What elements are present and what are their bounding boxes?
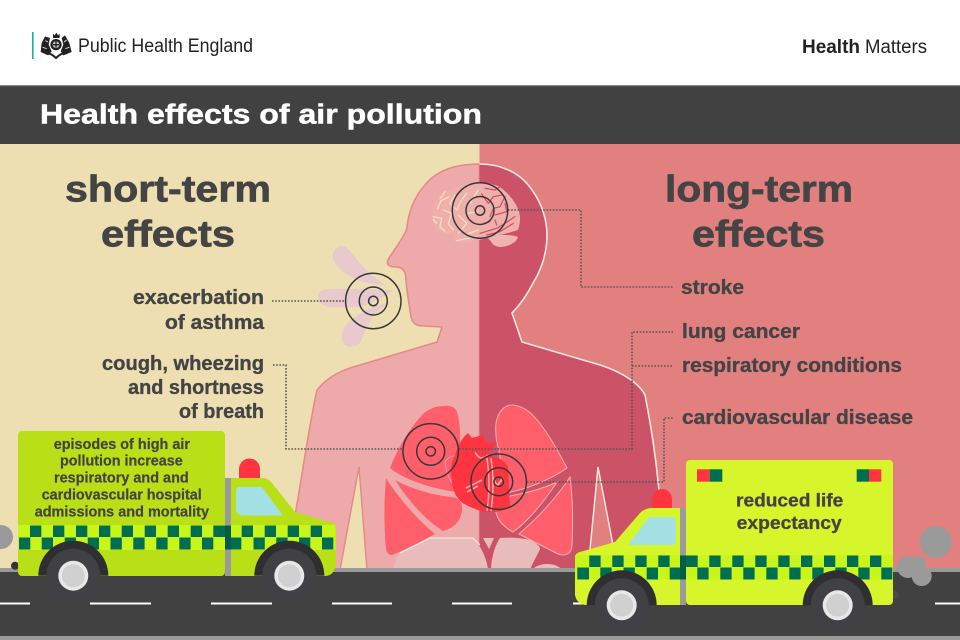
brain folds: left — [433, 190, 478, 241]
target: asthma — [346, 273, 401, 329]
title band — [0, 85, 960, 144]
rear flags right — [857, 469, 881, 482]
panel: short-term background — [0, 144, 480, 570]
dotted leader lines — [272, 210, 673, 482]
cab — [225, 478, 336, 576]
label: exacerbation of asthma: exacerbation — [133, 287, 264, 309]
title: Health effects of air pollution — [40, 98, 482, 130]
windscreen — [236, 487, 283, 516]
right middle lobe — [496, 482, 557, 532]
gap under right arm — [588, 467, 620, 570]
brain folds: right — [480, 187, 515, 235]
windscreen — [628, 517, 676, 545]
label: exacerbation of asthma — [133, 287, 265, 334]
heading: long-term effects — [665, 169, 853, 255]
ambulance text: admissions and mortality — [35, 505, 209, 521]
right upper lobe — [496, 405, 567, 493]
road — [0, 568, 960, 640]
heading: short-term effects: effects — [101, 214, 235, 255]
ambulance text: respiratory and and — [54, 470, 189, 486]
ambulance text — [35, 437, 209, 521]
logo wordmark: Public Health England — [78, 36, 253, 57]
ambulance text: pollution increase — [60, 454, 183, 470]
checker band — [18, 525, 336, 550]
checker band — [575, 555, 893, 580]
accent line — [32, 32, 34, 59]
health matters wordmark: Matters — [865, 37, 927, 58]
rear wheel — [802, 570, 873, 620]
lungs — [384, 405, 573, 555]
siren — [652, 489, 672, 508]
box body — [18, 431, 225, 576]
icon: royal crest — [41, 33, 72, 58]
label: exacerbation of asthma: of asthma — [165, 312, 265, 334]
front wheel — [586, 570, 657, 620]
lane markings — [0, 602, 960, 604]
door strip — [225, 478, 231, 576]
label: cardiovascular disease: cardiovascular disease — [682, 407, 913, 429]
label: respiratory conditions: respiratory conditions — [682, 355, 902, 377]
left exhaust pipe — [11, 562, 19, 570]
human body silhouette — [285, 164, 668, 572]
ambulance text: episodes of high air — [54, 437, 190, 453]
exhaust smoke: long-term — [897, 526, 952, 586]
health matters wordmark: Health — [802, 37, 860, 58]
heart — [445, 433, 510, 512]
heading: long-term effects: effects — [692, 214, 825, 255]
left lower lobe — [384, 478, 435, 555]
left upper lobe — [390, 406, 460, 492]
box body — [686, 460, 893, 605]
gap under left arm — [340, 467, 367, 570]
icon: breath puffs — [318, 246, 393, 347]
target: lungs — [403, 424, 458, 479]
health matters wordmark — [802, 37, 927, 58]
rear wheel — [38, 540, 108, 591]
ambulance text: expectancy — [737, 513, 842, 533]
right exhaust pipe — [891, 591, 899, 599]
front wheel — [254, 540, 324, 591]
right lower lobe — [519, 477, 573, 555]
strip over band — [225, 526, 231, 550]
ambulance text: cardiovascular hospital — [42, 487, 202, 503]
header bar — [0, 0, 960, 85]
body: long-term half — [480, 164, 668, 572]
cerebellum — [488, 235, 518, 247]
body: short-term half — [285, 164, 480, 572]
label: stroke: stroke — [681, 277, 744, 299]
left exhaust smoke — [0, 525, 13, 549]
ambulance text — [736, 491, 843, 533]
target: brain — [452, 183, 508, 238]
label: lung cancer: lung cancer — [682, 321, 800, 343]
ambulance text: reduced life — [736, 491, 843, 511]
label: cough, wheezing and shortness of breath: and shortness — [128, 377, 264, 399]
panel: long-term background — [480, 144, 960, 570]
ambulance: short-term — [18, 431, 336, 591]
label: cough, wheezing and shortness of breath: of breath — [179, 401, 264, 423]
siren — [239, 458, 260, 478]
ambulance: long-term — [575, 460, 893, 620]
body outline: long-term half — [480, 164, 668, 572]
cab — [575, 508, 686, 605]
label: cough, wheezing and shortness of breath: cough, wheezing — [102, 353, 264, 375]
icon: brain — [432, 183, 520, 247]
heading: short-term effects: short-term — [65, 169, 271, 210]
brain outline fill — [432, 183, 520, 242]
abdominal organs — [393, 538, 562, 570]
left middle lobe — [395, 480, 462, 531]
strip over band — [680, 556, 686, 580]
door strip — [680, 508, 686, 605]
heading: long-term effects: long-term — [665, 169, 853, 210]
rear flags left — [697, 469, 722, 482]
heading: short-term effects — [65, 169, 271, 255]
target: heart — [471, 454, 526, 509]
label: cough, wheezing and shortness of breath — [102, 353, 264, 423]
